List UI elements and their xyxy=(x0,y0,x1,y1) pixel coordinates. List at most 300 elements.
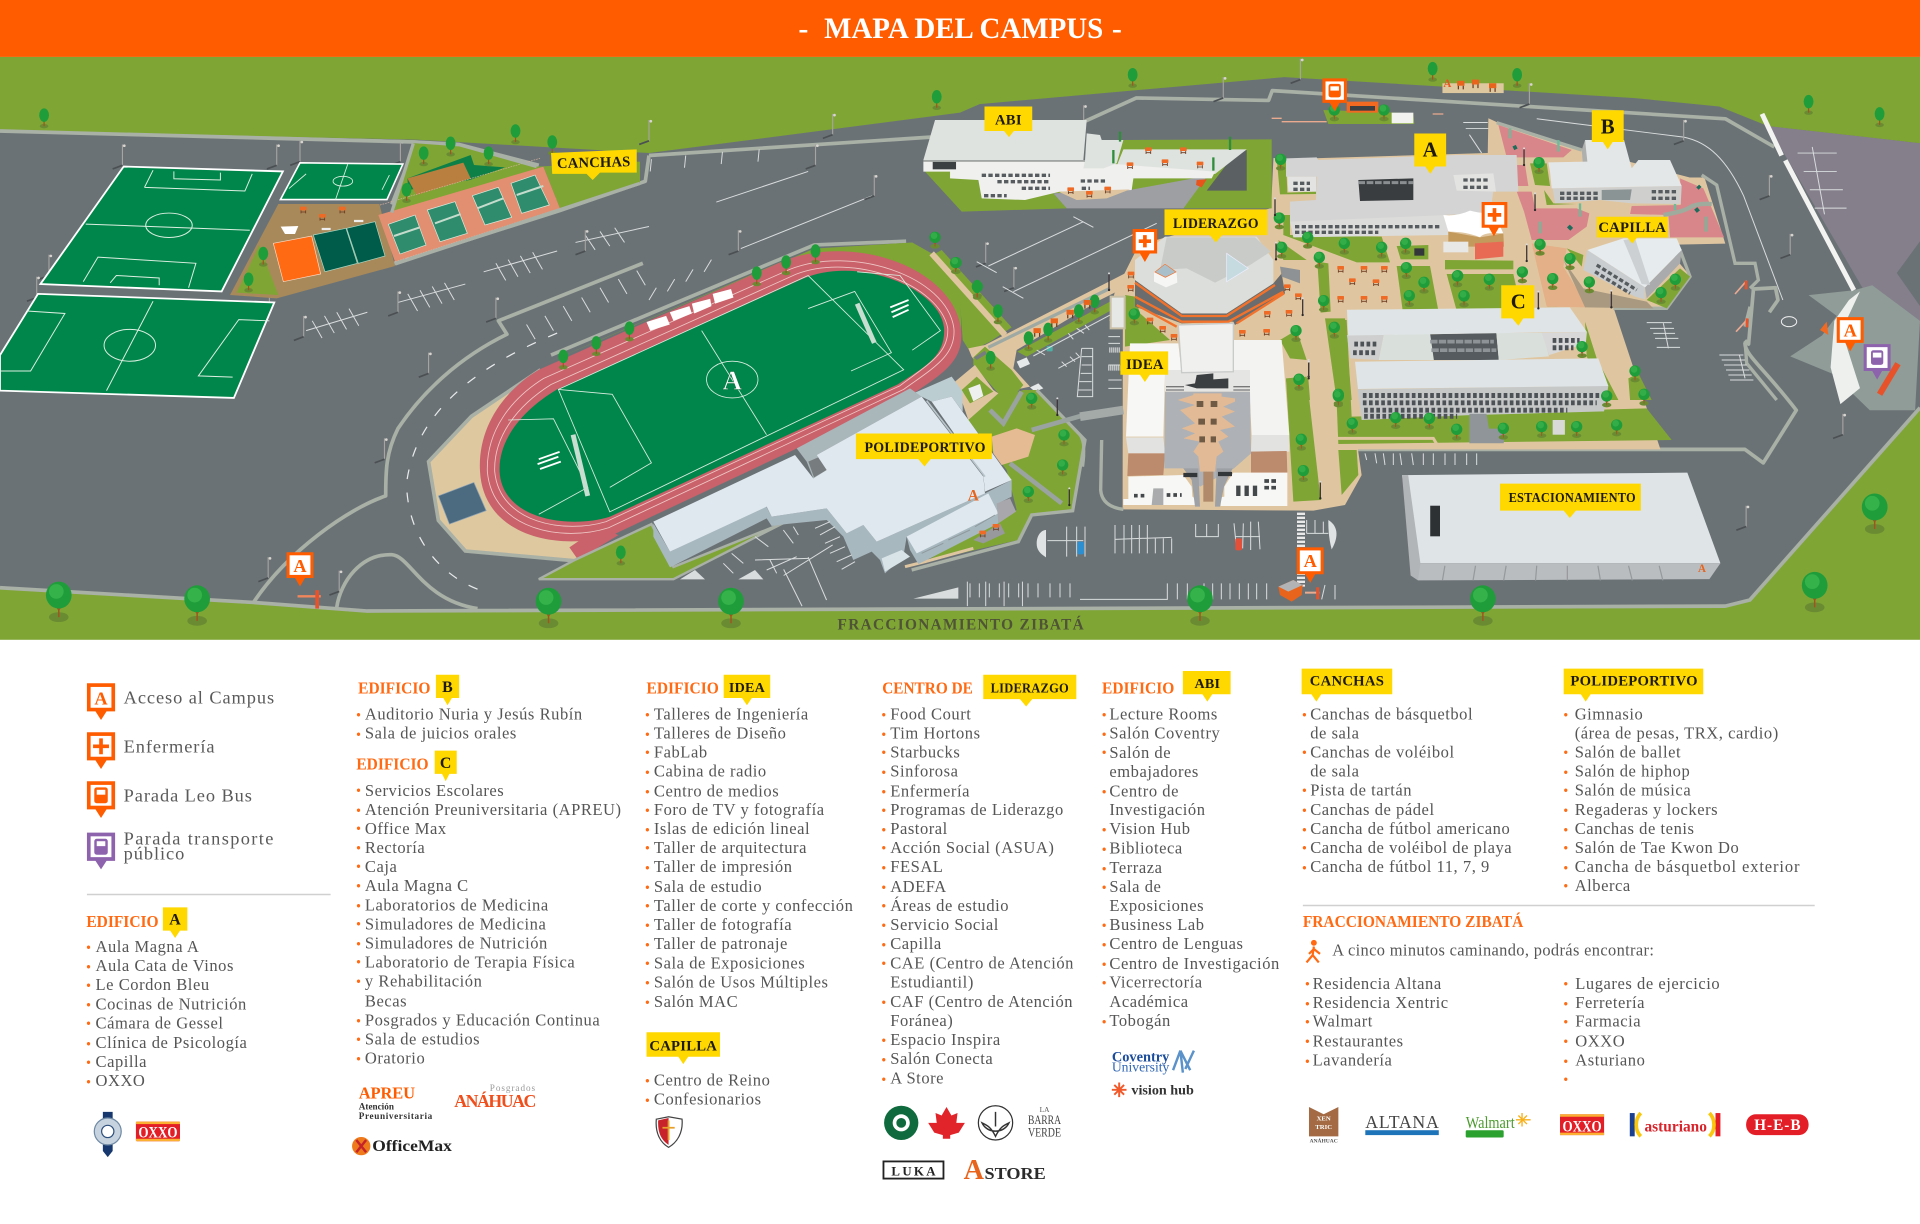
panel: centro de liderazgo: • xyxy=(882,956,886,970)
lot barrier xyxy=(1762,114,1854,290)
parking lines xyxy=(306,119,1847,606)
south campus trees xyxy=(1293,361,1622,499)
panel: edificio ABI: Centro de Investigación xyxy=(1109,954,1280,973)
panel: polideportivo: Salón de hiphop xyxy=(1575,761,1690,780)
map label: CAPILLA: CAPILLA xyxy=(1598,220,1666,236)
panel: polideportivo: • xyxy=(1564,841,1568,855)
map label: ABI xyxy=(984,107,1032,137)
panel: edificio IDEA: Islas de edición lineal xyxy=(654,819,810,838)
panel: edificio IDEA: • xyxy=(645,727,650,741)
legend: Leo Bus xyxy=(87,781,253,818)
panel: edificio IDEA: • xyxy=(645,938,650,952)
panel: canchas: de sala xyxy=(1310,723,1360,742)
panel: edificio IDEA: • xyxy=(645,880,650,894)
panel: edificio A xyxy=(86,907,248,1090)
map label: ABI: ABI xyxy=(995,112,1022,128)
panel: fraccionamiento Zibatá: • xyxy=(1564,977,1568,991)
panel: edificio A: Cocinas de Nutrición xyxy=(96,995,247,1014)
panel: capilla: Confesionarios xyxy=(654,1089,762,1108)
building: C xyxy=(1347,307,1608,443)
panel: fraccionamiento Zibatá: Residencia Altana xyxy=(1313,974,1442,993)
panel: edificio C: Simuladores de Medicina xyxy=(365,914,546,933)
panel: fraccionamiento Zibatá: • xyxy=(1564,1035,1568,1049)
panel: edificio C: Office Max xyxy=(365,819,447,838)
panel: edificio ABI: • xyxy=(1102,746,1106,760)
logos: Zibatá shops: XEN xyxy=(1317,1115,1331,1122)
panel: edificio C: Posgrados y Educación Continua xyxy=(365,1011,600,1030)
map label: POLIDEPORTIVO xyxy=(856,433,992,467)
panel: edificio ABI: • xyxy=(1102,785,1106,799)
map label: CANCHAS xyxy=(551,149,637,180)
logos: Zibatá shops: ALTANA xyxy=(1365,1112,1439,1132)
panel: edificio C: • xyxy=(356,937,361,951)
panel: edificio IDEA: Taller de fotografía xyxy=(654,915,792,934)
panel: fraccionamiento Zibatá: • xyxy=(1564,1054,1568,1068)
panel: edificio C: Laboratorios de Medicina xyxy=(365,895,549,914)
panel: canchas: • xyxy=(1302,861,1307,875)
legend: nursery xyxy=(87,732,215,769)
panel: edificio B: • xyxy=(356,727,361,741)
panel: edificio A: OXXO xyxy=(96,1071,145,1090)
panel: edificio ABI: • xyxy=(1102,918,1106,932)
accesses xyxy=(298,364,1898,609)
panel: canchas: • xyxy=(1302,784,1307,798)
panel: edificio B: EDIFICIO xyxy=(358,679,430,698)
marker: Leo Bus stop xyxy=(1322,78,1347,111)
panel: centro de liderazgo: Capilla xyxy=(890,934,942,953)
panel: edificio ABI: Tobogán xyxy=(1109,1011,1171,1030)
panel: canchas: • xyxy=(1302,823,1307,837)
logos: Le Cordon Bleu and OXXO: OXXO xyxy=(138,1125,178,1142)
panel: centro de liderazgo: Estudiantil) xyxy=(890,973,974,992)
panel: edificio ABI: Investigación xyxy=(1109,800,1206,819)
logos: Le Cordon Bleu and OXXO xyxy=(94,1112,180,1157)
panel: polideportivo xyxy=(1564,669,1800,895)
panel: canchas: Pista de tartán xyxy=(1310,780,1412,799)
entrance barrier xyxy=(1831,291,1860,404)
legend: access: Acceso al Campus xyxy=(124,687,275,707)
panel: edificio IDEA: • xyxy=(645,996,650,1010)
panel: polideportivo: Salón de Tae Kwon Do xyxy=(1575,838,1739,857)
bus stop and accesses xyxy=(1272,102,1443,124)
panel: edificio B: Auditorio Nuria y Jesús Rubín xyxy=(365,704,583,723)
logos: Zibatá shops: TRIC xyxy=(1315,1124,1332,1131)
panel: edificio IDEA: • xyxy=(645,918,650,932)
map label: CAPILLA xyxy=(1597,217,1668,244)
panel: polideportivo: (área de pesas, TRX, cardio) xyxy=(1575,723,1779,742)
panel: polideportivo: Gimnasio xyxy=(1575,704,1643,723)
panel: canchas: Cancha de voléibol de playa xyxy=(1310,838,1512,857)
panel: edificio B: • xyxy=(356,708,361,722)
logos: APREU, Anahuac, OfficeMax: Preuniversitaria xyxy=(359,1111,433,1121)
central campus trees and tables xyxy=(1108,154,1470,406)
building: idea xyxy=(1123,323,1289,507)
panel: centro de liderazgo: • xyxy=(882,880,886,894)
panel: polideportivo: Alberca xyxy=(1575,876,1631,895)
panel: canchas: Cancha de fútbol americano xyxy=(1310,819,1510,838)
panel: edificio C: • xyxy=(356,784,361,798)
logos: APREU, Anahuac, OfficeMax: Atención xyxy=(359,1101,394,1111)
panel: polideportivo: Cancha de básquetbol exterior xyxy=(1575,857,1800,876)
panel: edificio C: • xyxy=(356,975,361,989)
panel: centro de liderazgo: Programas de Liderazgo xyxy=(890,800,1064,819)
panel: capilla: Centro de Reino xyxy=(654,1071,770,1090)
panel: polideportivo: • xyxy=(1564,879,1568,893)
header bar xyxy=(0,0,1920,57)
panel: edificio C: • xyxy=(356,1032,361,1046)
logos: Coventry University and vision hub xyxy=(1112,1050,1194,1099)
panel: centro de liderazgo: Pastoral xyxy=(890,819,948,838)
panel: edificio IDEA: • xyxy=(645,708,650,722)
legend: public transport: público xyxy=(124,844,185,864)
legend: nursery: Enfermería xyxy=(124,736,215,756)
panel: edificio ABI: embajadores xyxy=(1109,762,1199,781)
title: MAPA DEL CAMPUS xyxy=(824,12,1103,45)
panel: edificio C: Rectoría xyxy=(365,838,425,857)
map label: building A xyxy=(1414,133,1446,174)
panel: edificio ABI: • xyxy=(1102,958,1106,972)
panel: centro de liderazgo: • xyxy=(882,918,886,932)
panel: fraccionamiento Zibatá: • xyxy=(1305,1035,1310,1049)
panel: edificio C: EDIFICIO xyxy=(356,755,429,774)
panel: edificio C: Oratorio xyxy=(365,1048,425,1067)
panel: edificio C: Sala de estudios xyxy=(365,1029,480,1048)
road dashes xyxy=(407,333,557,590)
panel: fraccionamiento Zibatá: Walmart xyxy=(1313,1012,1373,1031)
panel: centro de liderazgo: Food Court xyxy=(890,704,971,723)
panel: centro de liderazgo: • xyxy=(882,765,886,779)
building: estacionamiento xyxy=(1402,473,1720,580)
panel: edificio C: Caja xyxy=(365,857,397,876)
map label: building B: B xyxy=(1601,114,1615,138)
panel: centro de liderazgo: • xyxy=(882,708,886,722)
panel: edificio IDEA: Taller de arquitectura xyxy=(654,838,807,857)
panel: canchas xyxy=(1302,669,1512,876)
marker: access A west xyxy=(287,552,313,587)
panel: edificio ABI: Académica xyxy=(1109,992,1189,1011)
panel: fraccionamiento Zibatá: • xyxy=(1305,997,1310,1011)
panel: fraccionamiento Zibatá: • xyxy=(1564,1015,1568,1029)
panel: polideportivo: Salón de música xyxy=(1575,780,1691,799)
campus map xyxy=(0,57,1920,640)
building: B xyxy=(1548,140,1682,204)
panel: edificio A: Le Cordon Bleu xyxy=(96,975,210,994)
logos: leadership food court: STORE xyxy=(984,1164,1046,1183)
logos: leadership food court: BARRA xyxy=(1028,1113,1061,1127)
panel: edificio ABI: • xyxy=(1102,727,1106,741)
logos: APREU, Anahuac, OfficeMax: ANÁHUAC xyxy=(454,1091,536,1111)
panel: polideportivo: POLIDEPORTIVO xyxy=(1570,674,1698,690)
panel: edificio IDEA: • xyxy=(645,785,650,799)
panel: centro de liderazgo: CAF (Centro de Atención xyxy=(890,992,1073,1011)
panel: edificio C: • xyxy=(356,917,361,931)
panel: edificio IDEA: IDEA xyxy=(729,680,766,696)
panel: fraccionamiento Zibatá: OXXO xyxy=(1575,1031,1625,1050)
panel: edificio IDEA: EDIFICIO xyxy=(647,679,719,698)
panel: edificio C: • xyxy=(356,1014,361,1028)
panel: edificio ABI: • xyxy=(1102,823,1106,837)
building: capilla xyxy=(1583,238,1682,299)
logo: capilla shield xyxy=(656,1117,682,1147)
panel: edificio C: Atención Preuniversitaria (APREU) xyxy=(365,800,622,819)
panel: edificio IDEA: • xyxy=(645,746,650,760)
panel: centro de liderazgo: Salón Conecta xyxy=(890,1049,993,1068)
panel: fraccionamiento Zibatá: A cinco minutos caminando, podrás encontrar: xyxy=(1332,941,1654,960)
panel: centro de liderazgo: Áreas de estudio xyxy=(890,896,1009,915)
panel: edificio IDEA: • xyxy=(645,956,650,970)
logos: Zibatá shops: OXXO xyxy=(1562,1118,1602,1135)
panel: centro de liderazgo: ADEFA xyxy=(890,877,947,896)
panel: edificio C: y Rehabilitación xyxy=(365,971,483,990)
marker: access A south xyxy=(1297,547,1324,583)
panel: edificio A: • xyxy=(86,940,91,954)
upper plaza xyxy=(1442,78,1504,93)
panel: fraccionamiento Zibatá: • xyxy=(1305,1054,1310,1068)
panel: canchas: Canchas de voléibol xyxy=(1310,742,1455,761)
marker: public transport xyxy=(1864,344,1891,380)
panel: edificio IDEA: Talleres de Diseño xyxy=(654,723,786,742)
panel: canchas: Cancha de fútbol 11, 7, 9 xyxy=(1310,857,1490,876)
panel: edificio ABI: • xyxy=(1102,708,1106,722)
building: ABI xyxy=(923,120,1272,298)
panel: edificio IDEA xyxy=(645,675,854,1011)
map label: IDEA: IDEA xyxy=(1126,357,1164,373)
logos: leadership food court: A xyxy=(964,1155,985,1186)
panel: polideportivo: Salón de ballet xyxy=(1575,742,1681,761)
stadium and track: A xyxy=(723,365,743,395)
panel: edificio ABI: • xyxy=(1102,842,1106,856)
panel: edificio B xyxy=(356,675,583,742)
legend: public transport xyxy=(87,828,274,869)
panel: edificio IDEA: • xyxy=(645,899,650,913)
outer trees xyxy=(39,62,1888,628)
building: A xyxy=(1286,155,1518,259)
panel: fraccionamiento Zibatá: • xyxy=(1305,1015,1310,1029)
logos: APREU, Anahuac, OfficeMax: Posgrados xyxy=(490,1083,536,1093)
divider left xyxy=(87,893,331,895)
map label: CANCHAS: CANCHAS xyxy=(557,154,631,172)
panel: fraccionamiento Zibatá: Lugares de ejercicio xyxy=(1575,974,1720,993)
panel: centro de liderazgo: • xyxy=(882,938,886,952)
panel: edificio IDEA: Sala de Exposiciones xyxy=(654,954,805,973)
lawns: central campus xyxy=(1111,158,1522,400)
marker: nursery west xyxy=(1133,229,1157,262)
panel: fraccionamiento Zibatá: Residencia Xentric xyxy=(1313,993,1449,1012)
panel: edificio A: A xyxy=(169,911,181,928)
panel: fraccionamiento Zibatá: Restaurantes xyxy=(1313,1031,1404,1050)
football fields xyxy=(0,163,403,398)
panel: edificio A: • xyxy=(86,998,91,1012)
panel: edificio C: • xyxy=(356,860,361,874)
legend: Leo Bus: Parada Leo Bus xyxy=(124,785,253,805)
marker: nursery east xyxy=(1482,202,1507,236)
building: estacionamiento: A xyxy=(1698,563,1706,575)
panel: canchas: de sala xyxy=(1310,761,1360,780)
panel: centro de liderazgo: LIDERAZGO xyxy=(991,680,1069,696)
panel: edificio A: Aula Cata de Vinos xyxy=(96,956,234,975)
panel: centro de liderazgo: Tim Hortons xyxy=(890,723,981,742)
panel: centro de liderazgo: A Store xyxy=(890,1069,944,1088)
panel: edificio ABI: Business Lab xyxy=(1109,915,1205,934)
panel: centro de liderazgo: • xyxy=(882,1053,886,1067)
panel: edificio C: • xyxy=(356,822,361,836)
map label: IDEA xyxy=(1120,351,1168,382)
lamp posts xyxy=(27,59,1846,595)
panel: centro de liderazgo: Sinforosa xyxy=(890,761,959,780)
panel: edificio C: • xyxy=(356,899,361,913)
panel: edificio ABI: Lecture Rooms xyxy=(1109,704,1218,723)
panel: edificio ABI: Salón Coventry xyxy=(1109,723,1221,742)
panel: centro de liderazgo: • xyxy=(882,996,886,1010)
panel: edificio ABI: Centro de xyxy=(1109,782,1179,801)
panel: edificio IDEA: • xyxy=(645,861,650,875)
panel: polideportivo: • xyxy=(1564,803,1568,817)
title: - xyxy=(1112,12,1122,45)
panel: edificio C: Simuladores de Nutrición xyxy=(365,933,548,952)
panel: edificio B: B xyxy=(442,679,453,696)
logos: APREU, Anahuac, OfficeMax xyxy=(352,1083,536,1155)
panel: edificio IDEA: Talleres de Ingeniería xyxy=(654,704,809,723)
panel: canchas: CANCHAS xyxy=(1310,674,1384,690)
panel: centro de liderazgo: • xyxy=(882,861,886,875)
panel: centro de liderazgo: • xyxy=(882,746,886,760)
map label: building A: A xyxy=(1423,138,1438,162)
panel: edificio ABI: Centro de Lenguas xyxy=(1109,934,1244,953)
map label: building C: C xyxy=(1511,290,1526,314)
legend: access xyxy=(87,683,275,720)
panel: edificio A: Capilla xyxy=(96,1052,147,1071)
marker: access A south: A xyxy=(1304,551,1318,571)
panel: centro de liderazgo: Espacio Inspira xyxy=(890,1030,1001,1049)
panel: edificio C: • xyxy=(356,955,361,969)
panel: centro de liderazgo: Servicio Social xyxy=(890,915,999,934)
panel: edificio IDEA: • xyxy=(645,765,650,779)
marker: access A east: A xyxy=(1844,321,1858,341)
panel: edificio C: C xyxy=(440,755,452,772)
title: - xyxy=(798,12,808,45)
logos: leadership food court: LUKA xyxy=(891,1165,936,1179)
campus paved areas xyxy=(1109,118,1725,511)
panel: polideportivo: • xyxy=(1564,765,1568,779)
panel: edificio A: Aula Magna A xyxy=(96,937,199,956)
lawns and gardens: east campus xyxy=(1497,123,1828,400)
panel: edificio ABI: ABI xyxy=(1194,676,1220,692)
panel: fraccionamiento Zibatá: • xyxy=(1564,997,1568,1011)
panel: polideportivo: • xyxy=(1564,823,1568,837)
green around polideportivo xyxy=(539,523,784,579)
panel: edificio ABI: Salón de xyxy=(1109,743,1171,762)
road kerbs xyxy=(0,91,1920,611)
panel: centro de liderazgo: • xyxy=(882,899,886,913)
logos: leadership food court: LA xyxy=(1040,1105,1050,1114)
panel: edificio ABI: Vicerrectoría xyxy=(1109,973,1203,992)
panel: edificio IDEA: • xyxy=(645,803,650,817)
panel: edificio C: • xyxy=(356,841,361,855)
panel: edificio IDEA: Salón de Usos Múltiples xyxy=(654,973,829,992)
logos: Coventry University and vision hub: Coventry xyxy=(1112,1050,1170,1066)
panel: edificio IDEA: • xyxy=(645,841,650,855)
marker: access A west: A xyxy=(293,556,307,576)
panel: fraccionamiento Zibatá: Farmacia xyxy=(1575,1012,1641,1031)
logos: Zibatá shops: ANÁHUAC xyxy=(1310,1136,1338,1144)
panel: edificio A: • xyxy=(86,1075,91,1089)
map label: POLIDEPORTIVO: POLIDEPORTIVO xyxy=(864,440,986,456)
panel: fraccionamiento Zibatá: • xyxy=(1564,1073,1568,1087)
lawns: south campus xyxy=(1080,320,1672,602)
panel: fraccionamiento Zibatá: FRACCIONAMIENTO ZIBATÁ xyxy=(1303,912,1523,931)
logos: leadership food court xyxy=(883,1105,1061,1186)
panel: polideportivo: • xyxy=(1564,708,1568,722)
panel: edificio ABI xyxy=(1102,671,1280,1030)
lawns and paths east of stadium xyxy=(930,250,1130,413)
panel: edificio C: Becas xyxy=(365,992,407,1011)
stadium and track xyxy=(429,242,961,561)
panel: centro de liderazgo: CAE (Centro de Atención xyxy=(890,954,1074,973)
panel: centro de liderazgo: Acción Social (ASUA) xyxy=(890,838,1054,857)
panel: fraccionamiento Zibatá: Asturiano xyxy=(1575,1050,1645,1069)
icon: walker xyxy=(1307,941,1320,962)
east campus trees xyxy=(1452,147,1681,407)
panel: fraccionamiento Zibatá: Ferretería xyxy=(1575,993,1645,1012)
panel: centro de liderazgo: Foránea) xyxy=(890,1011,953,1030)
logos: Coventry University and vision hub: vision hub xyxy=(1131,1083,1194,1099)
panel: centro de liderazgo: • xyxy=(882,727,886,741)
panel: canchas: Canchas de pádel xyxy=(1310,800,1435,819)
panel: edificio IDEA: Foro de TV y fotografía xyxy=(654,800,825,819)
logos: Zibatá shops: H-E-B xyxy=(1754,1117,1801,1134)
panel: edificio IDEA: • xyxy=(645,976,650,990)
map label: LIDERAZGO: LIDERAZGO xyxy=(1173,216,1259,232)
building: polideportivo xyxy=(653,365,1090,599)
panel: centro de liderazgo xyxy=(882,675,1076,1088)
panel: edificio ABI: Terraza xyxy=(1109,858,1163,877)
panel: edificio C: • xyxy=(356,1052,361,1066)
panel: edificio C: Servicios Escolares xyxy=(365,781,504,800)
panel: edificio ABI: Exposiciones xyxy=(1109,896,1204,915)
panel: fraccionamiento Zibatá: Lavandería xyxy=(1313,1050,1393,1069)
panel: centro de liderazgo: • xyxy=(882,1033,886,1047)
panel: edificio IDEA: Salón MAC xyxy=(654,992,738,1011)
panel: edificio A: • xyxy=(86,978,91,992)
panel: canchas: • xyxy=(1302,803,1307,817)
panel: edificio ABI: • xyxy=(1102,938,1106,952)
panel: edificio C: • xyxy=(356,803,361,817)
panel: edificio A: Clínica de Psicología xyxy=(96,1033,248,1052)
logos: APREU, Anahuac, OfficeMax: APREU xyxy=(359,1083,415,1102)
entrance plaza xyxy=(1790,285,1920,410)
panel: edificio A: Cámara de Gessel xyxy=(96,1014,224,1033)
panel: edificio A: EDIFICIO xyxy=(86,912,159,931)
panel: capilla: • xyxy=(645,1093,650,1107)
panel: polideportivo: • xyxy=(1564,746,1568,760)
panel: canchas: • xyxy=(1302,841,1307,855)
panel: centro de liderazgo: Starbucks xyxy=(890,742,960,761)
panel: capilla xyxy=(645,1032,770,1108)
panel: edificio C: Laboratorio de Terapia Física xyxy=(365,952,575,971)
panel: edificio C xyxy=(356,751,622,1067)
panel: edificio ABI: Biblioteca xyxy=(1109,838,1183,857)
panel: centro de liderazgo: • xyxy=(882,823,886,837)
map label: building B xyxy=(1592,110,1624,149)
panel: edificio IDEA: Cabina de radio xyxy=(654,761,767,780)
panel: edificio IDEA: Taller de corte y confección xyxy=(654,896,854,915)
road name: FRACCIONAMIENTO ZIBATÁ xyxy=(838,616,1084,633)
panel: edificio ABI: • xyxy=(1102,1015,1106,1029)
panel: edificio ABI: Vision Hub xyxy=(1109,819,1191,838)
logos: APREU, Anahuac, OfficeMax: OfficeMax xyxy=(372,1138,452,1155)
panel: capilla: CAPILLA xyxy=(649,1039,717,1055)
panel: centro de liderazgo: • xyxy=(882,803,886,817)
